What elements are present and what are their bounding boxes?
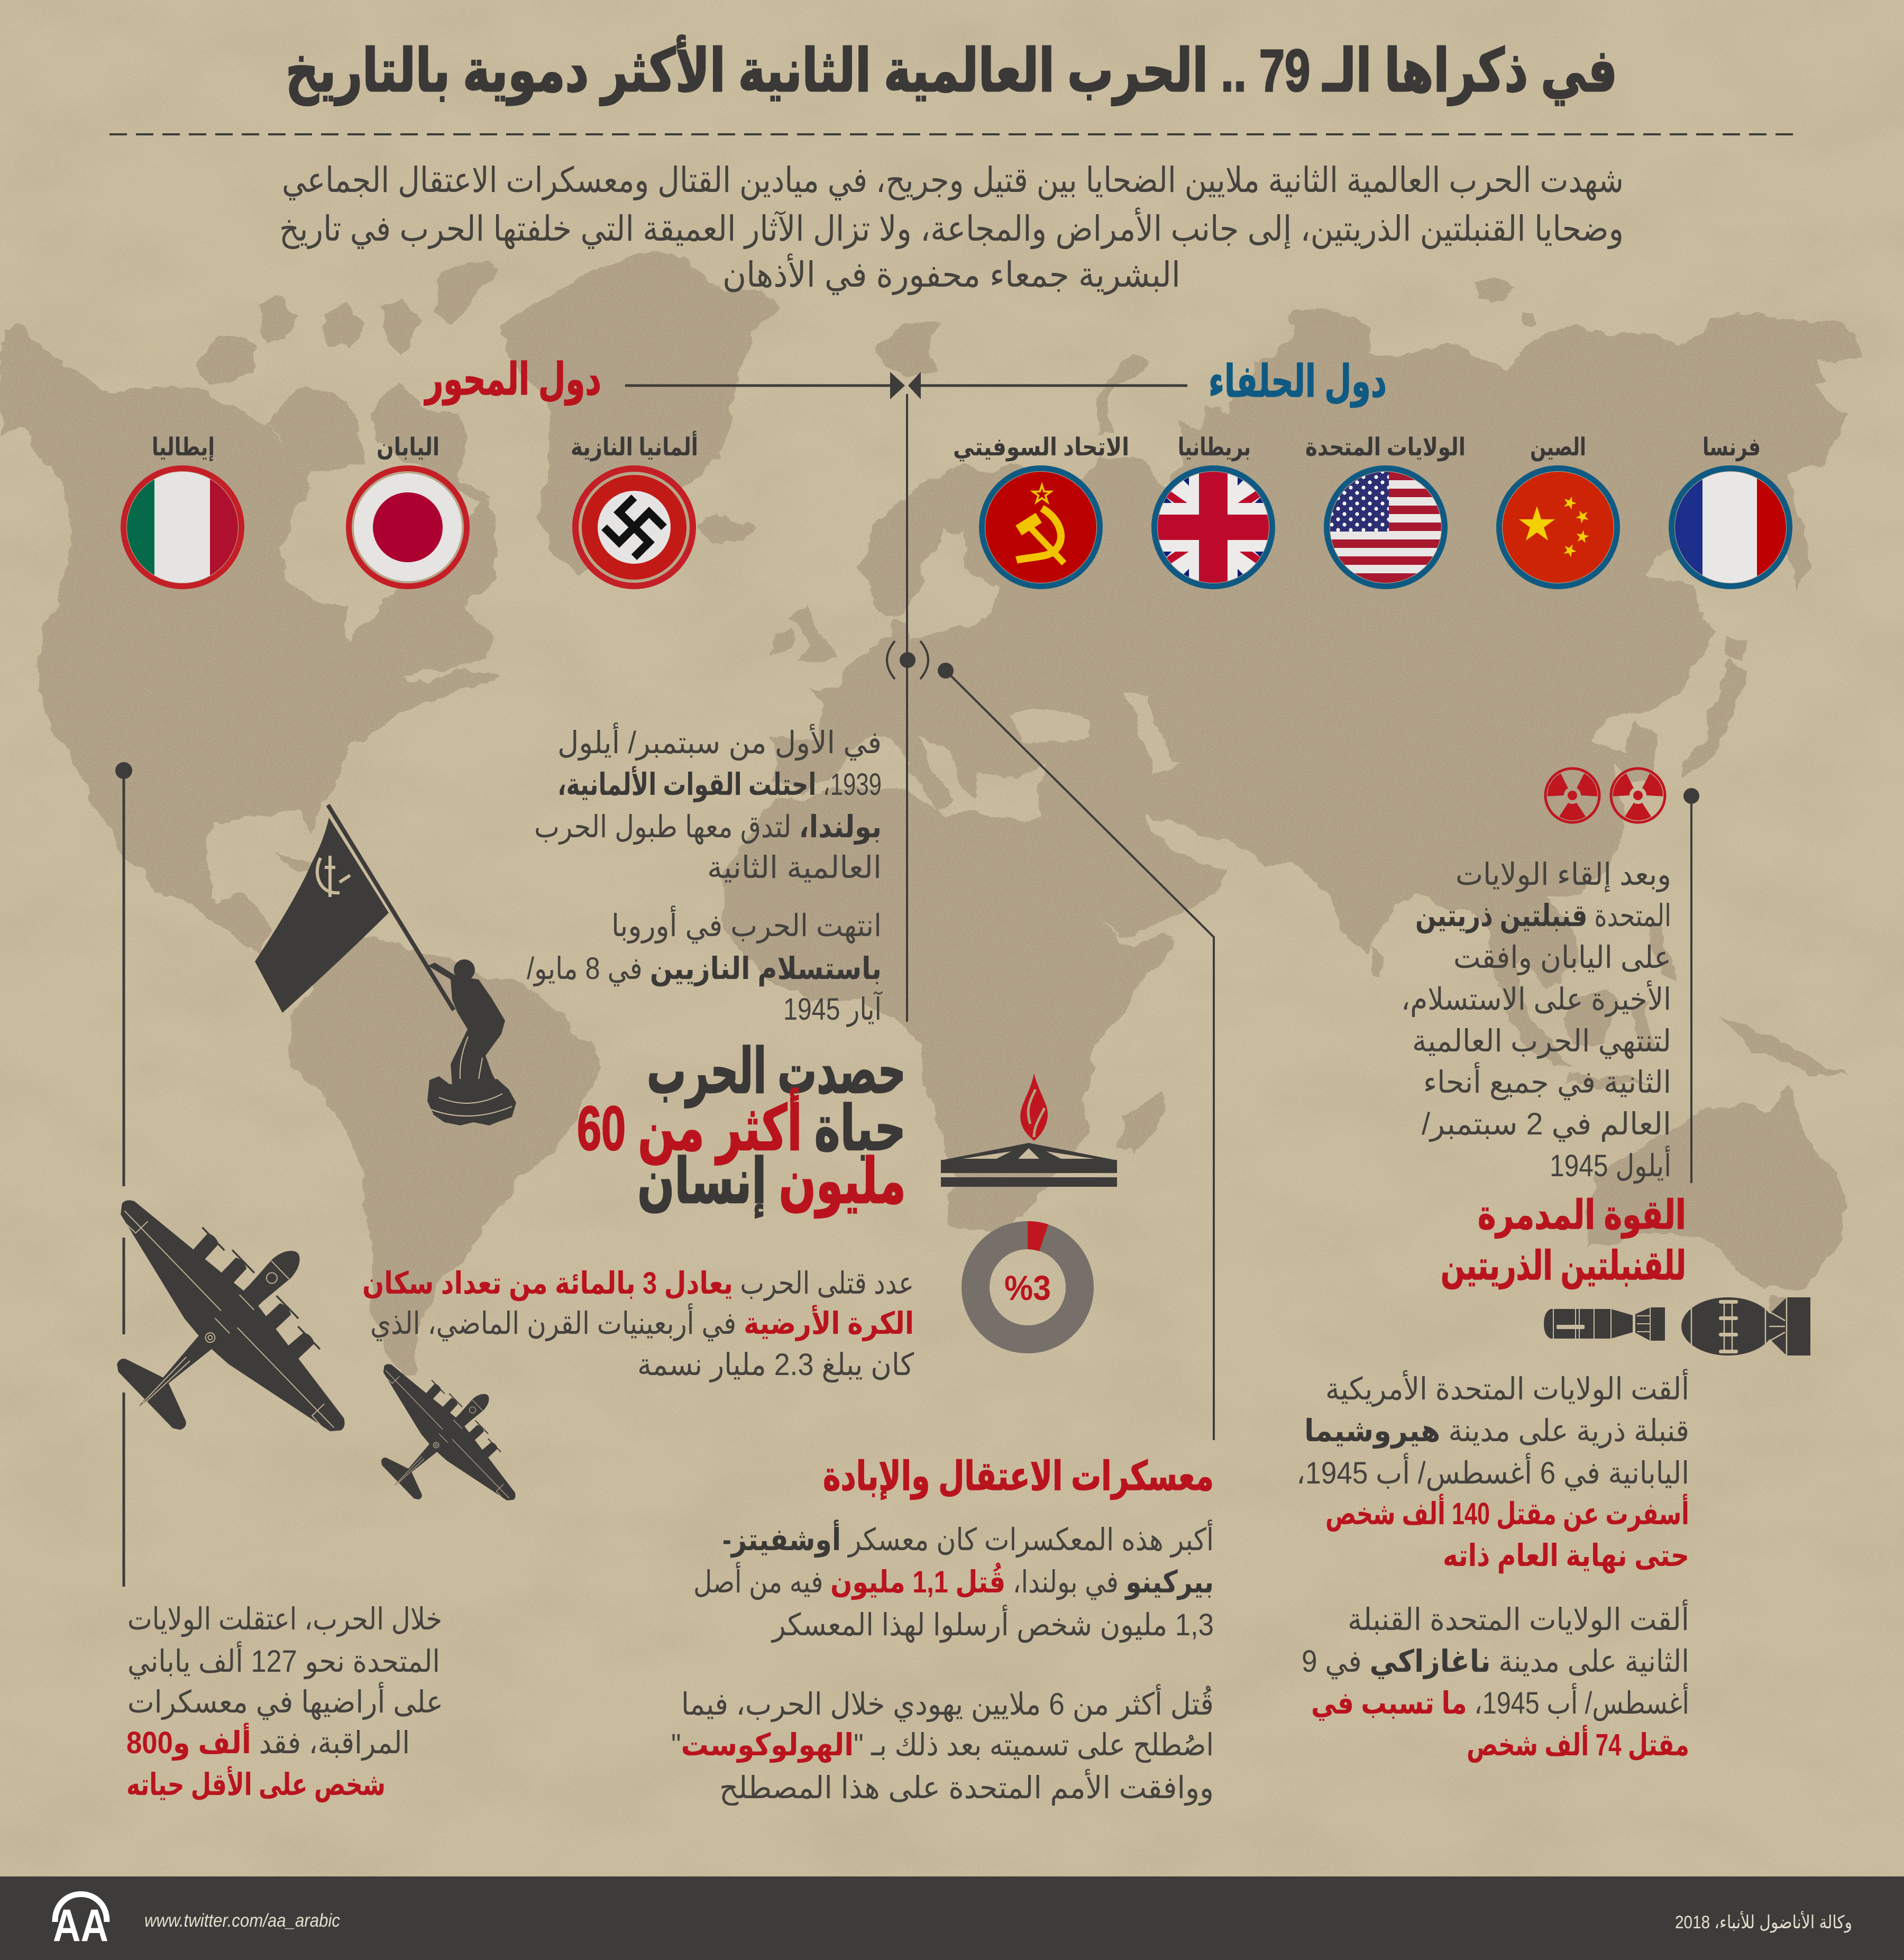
footer: twitter address: www.twitter.com/aa_arabic [144, 1910, 340, 1931]
allied & axis country labels: الولايات المتحدة [1305, 433, 1466, 462]
text: share of world population: عدد قتلى الحرب يعادل 3 بالمائة من تعداد سكان [362, 1266, 914, 1302]
text: start and end of war: باستسلام النازيين في 8 مايو/ [527, 951, 882, 987]
text: start and end of war: في الأول من سبتمبر/ أيلول [557, 722, 882, 761]
text: camps: قُتل أكثر من 6 ملايين يهودي خلال الحرب، فيما [681, 1684, 1214, 1723]
text: Hiroshima: ألقت الولايات المتحدة الأمريكية [1325, 1369, 1689, 1407]
text: Nagasaki: ألقت الولايات المتحدة القنبلة [1348, 1599, 1689, 1638]
leader line: left column [115, 762, 132, 1587]
flag: United States [1324, 465, 1448, 589]
allied & axis country labels: إيطاليا [152, 433, 215, 462]
intro paragraph: شهدت الحرب العالمية الثانية ملايين الضحايا بين قتيل وجريح، في ميادين القتال ومعسكرات الاعتقال الجماعي [282, 160, 1624, 200]
text: camps: بيركينو في بولندا، قُتل 1,1 مليون فيه من أصل [693, 1562, 1214, 1600]
text: Nagasaki: مقتل 74 ألف شخص [1467, 1725, 1689, 1763]
icon: eternal flame monument [941, 1073, 1117, 1187]
text: Hiroshima: أسفرت عن مقتل 140 ألف شخص [1325, 1494, 1689, 1532]
text: camps: أكبر هذه المعكسرات كان معسكر أوشفيتز- [722, 1519, 1214, 1558]
flag: Soviet Union [979, 465, 1103, 589]
flag: Japan [346, 465, 470, 589]
flag: Britain [1151, 465, 1275, 589]
footer bar [0, 1876, 1904, 1960]
leader line to camps section [938, 663, 1214, 1440]
text: camps: 1,3 مليون شخص أرسلوا لهذا المعسكر [771, 1605, 1214, 1643]
text: start and end of war: بولندا، لتدق معها طبول الحرب [534, 810, 882, 845]
heading: destructive power of the bombs [1441, 1193, 1686, 1289]
logo: AA: AA [53, 1900, 108, 1951]
text: Japanese internment: شخص على الأقل حياته [126, 1766, 386, 1802]
allied & axis country labels: ألمانيا النازية [571, 431, 698, 461]
text: Hiroshima: اليابانية في 6 أغسطس/ أب 1945، [1296, 1453, 1689, 1491]
allied & axis country labels: فرنسا [1702, 433, 1761, 462]
text: Nagasaki: الثانية على مدينة ناغازاكي في 9 [1302, 1644, 1689, 1680]
leader line: Japan [1683, 788, 1699, 1183]
text: camps: اصُطلح على تسميته بعد ذلك بـ "الهولوكوست" [671, 1728, 1214, 1763]
text: start and end of war: آيار 1945 [783, 991, 883, 1027]
text: Nagasaki: أغسطس/ أب 1945، ما تسبب في [1311, 1683, 1689, 1721]
text: Japanese internment: خلال الحرب، اعتقلت الولايات [127, 1602, 442, 1637]
text: Japanese internment [126, 1602, 443, 1802]
icon: flag-raising soldier [255, 805, 516, 1125]
text: Japanese internment: المتحدة نحو 127 ألف ياباني [127, 1641, 440, 1680]
text: Nagasaki [1302, 1599, 1689, 1763]
text: surrender of Japan: المتحدة قنبلتين ذريتين [1415, 899, 1671, 934]
text: surrender of Japan: الثانية في جميع أنحاء [1423, 1062, 1671, 1101]
arrows meeting at centre [625, 372, 1187, 399]
heading: camps: معسكرات الاعتقال والإبادة [823, 1454, 1214, 1500]
allied & axis country labels: الصين [1530, 433, 1586, 462]
text: Japanese internment: على أراضيها في معسكرات [127, 1682, 443, 1720]
headline: death toll [577, 1037, 906, 1218]
headline: death toll: حصدت الحرب [647, 1037, 906, 1108]
text: Hiroshima: قنبلة ذرية على مدينة هيروشيما [1304, 1414, 1689, 1449]
headline: death toll: حياة أكثر من 60 [577, 1087, 906, 1165]
icon: small bomber [329, 1329, 553, 1553]
allied & axis country labels [152, 431, 1761, 462]
icon: large bomber [29, 1140, 407, 1520]
text: surrender of Japan: لتنتهي الحرب العالمية [1412, 1024, 1671, 1059]
heading: destructive power of the bombs: للقنبلتين الذريتين [1441, 1243, 1686, 1289]
flag: Italy [121, 465, 244, 589]
text: surrender of Japan: على اليابان وافقت [1453, 940, 1671, 976]
flag: Nazi Germany [572, 465, 696, 589]
text: camps [671, 1519, 1214, 1806]
text: start and end of war: انتهت الحرب في أوروبا [611, 905, 882, 944]
text: surrender of Japan: وبعد إلقاء الولايات [1456, 857, 1671, 893]
donut chart: 3 percent: %3 [1004, 1268, 1051, 1307]
text: surrender of Japan: الأخيرة على الاستسلام، [1401, 980, 1671, 1018]
text: share of world population [362, 1266, 914, 1382]
icon: Little Boy bomb [1544, 1307, 1665, 1341]
heading: axis: دول المحور [424, 354, 601, 406]
flag: France [1669, 465, 1792, 589]
flag: China [1496, 465, 1620, 589]
text: Japanese internment: المراقبة، فقد ألف و800 [126, 1723, 410, 1761]
text: start and end of war: العالمية الثانية [707, 850, 882, 885]
text: Hiroshima: حتى نهاية العام ذاته [1443, 1538, 1689, 1574]
heading: destructive power of the bombs: القوة المدمرة [1478, 1193, 1686, 1239]
headline: death toll: مليون إنسان [637, 1147, 906, 1218]
intro paragraph [279, 160, 1624, 295]
text: share of world population: الكرة الأرضية في أربعينيات القرن الماضي، الذي [370, 1303, 914, 1342]
text: surrender of Japan: العالم في 2 سبتمبر/ [1422, 1107, 1671, 1142]
heading: allies: دول الحلفاء [1209, 356, 1387, 408]
text: start and end of war: 1939، احتلت القوات الألمانية، [557, 766, 882, 803]
text: surrender of Japan: أيلول 1945 [1550, 1146, 1671, 1184]
allied & axis country labels: الاتحاد السوفيتي [953, 433, 1129, 462]
centre timeline with signal dot [887, 394, 928, 1022]
title: في ذكراها الـ 79 .. الحرب العالمية الثانية الأكثر دموية بالتاريخ [286, 35, 1617, 106]
text: camps: ووافقت الأمم المتحدة على هذا المصطلح [719, 1769, 1214, 1806]
text: start and end of war [527, 722, 883, 1027]
intro paragraph: وضحايا القنبلتين الذريتين، إلى جانب الأمراض والمجاعة، ولا تزال الآثار العميقة التي خلفتها الحرب في تاريخ [279, 207, 1624, 250]
world map [0, 254, 1860, 1375]
icon: two radiation symbols [1544, 768, 1666, 822]
donut chart: 3 percent [975, 1221, 1080, 1339]
text: Hiroshima [1296, 1369, 1689, 1574]
allied & axis country labels: اليابان [377, 433, 440, 461]
allied & axis country labels: بريطانيا [1178, 433, 1251, 462]
icon: Fat Man bomb [1681, 1297, 1810, 1355]
footer: copyright: وكالة الأناضول للأنباء، 2018 [1675, 1911, 1852, 1933]
intro paragraph: البشرية جمعاء محفورة في الأذهان [722, 253, 1180, 295]
text: surrender of Japan [1401, 857, 1671, 1184]
text: share of world population: كان يبلغ 2.3 مليار نسمة [637, 1348, 914, 1382]
